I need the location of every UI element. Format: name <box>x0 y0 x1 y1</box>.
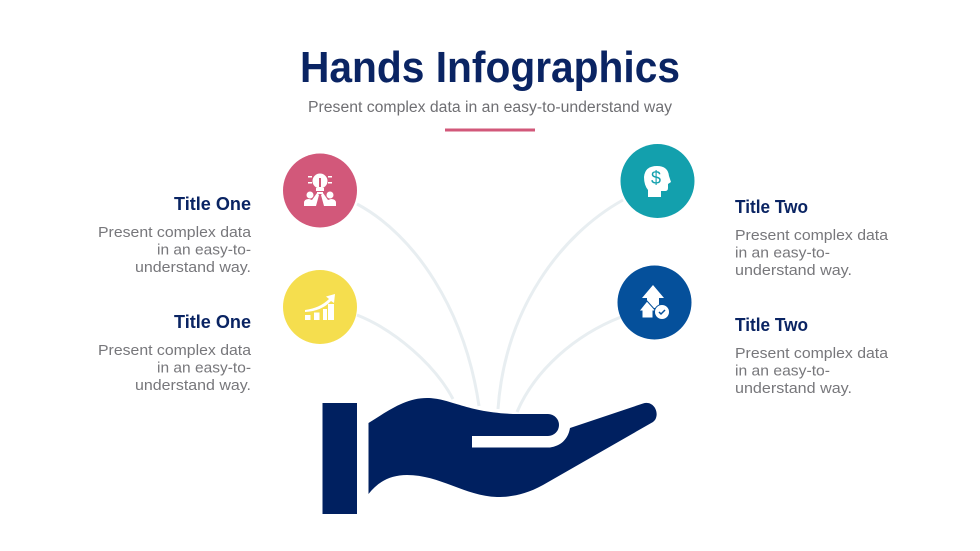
text block: left top: Title One <box>174 194 251 214</box>
text block: right top: Title Two <box>735 197 808 217</box>
icon: hand <box>322 398 657 514</box>
text block: left bottom: understand way. <box>135 378 251 394</box>
text block: right bottom: Present complex data <box>735 346 889 362</box>
subtitle: Present complex data in an easy-to-understand way <box>308 99 672 116</box>
text block: right top: in an easy-to- <box>735 246 830 262</box>
icon: pink circle with lightbulb and people <box>283 154 357 228</box>
text block: left top: Present complex data <box>98 225 252 241</box>
text block: left bottom: in an easy-to- <box>157 360 251 376</box>
text block: right top: understand way. <box>735 263 852 279</box>
text block: left bottom <box>98 312 252 394</box>
text block: right bottom: Title Two <box>735 315 808 335</box>
icon: yellow circle with growth chart <box>283 270 357 344</box>
title underline <box>445 128 535 132</box>
text block: right bottom: in an easy-to- <box>735 364 830 380</box>
text block: right top <box>735 197 889 279</box>
text block: right top: Present complex data <box>735 228 889 244</box>
text block: left bottom: Title One <box>174 312 251 332</box>
icon: teal circle with head and dollar: $ <box>651 168 661 188</box>
icon: blue circle with arrows and check badge <box>618 266 692 340</box>
text block: right bottom: understand way. <box>735 381 852 397</box>
connector lines <box>357 200 623 412</box>
text block: left top: understand way. <box>135 260 251 276</box>
text block: right bottom <box>735 315 889 397</box>
title: Hands Infographics <box>300 43 680 92</box>
text block: left top: in an easy-to- <box>157 242 251 258</box>
text block: left bottom: Present complex data <box>98 343 252 359</box>
icon: teal circle with head and dollar <box>620 144 694 218</box>
text block: left top <box>98 194 252 276</box>
